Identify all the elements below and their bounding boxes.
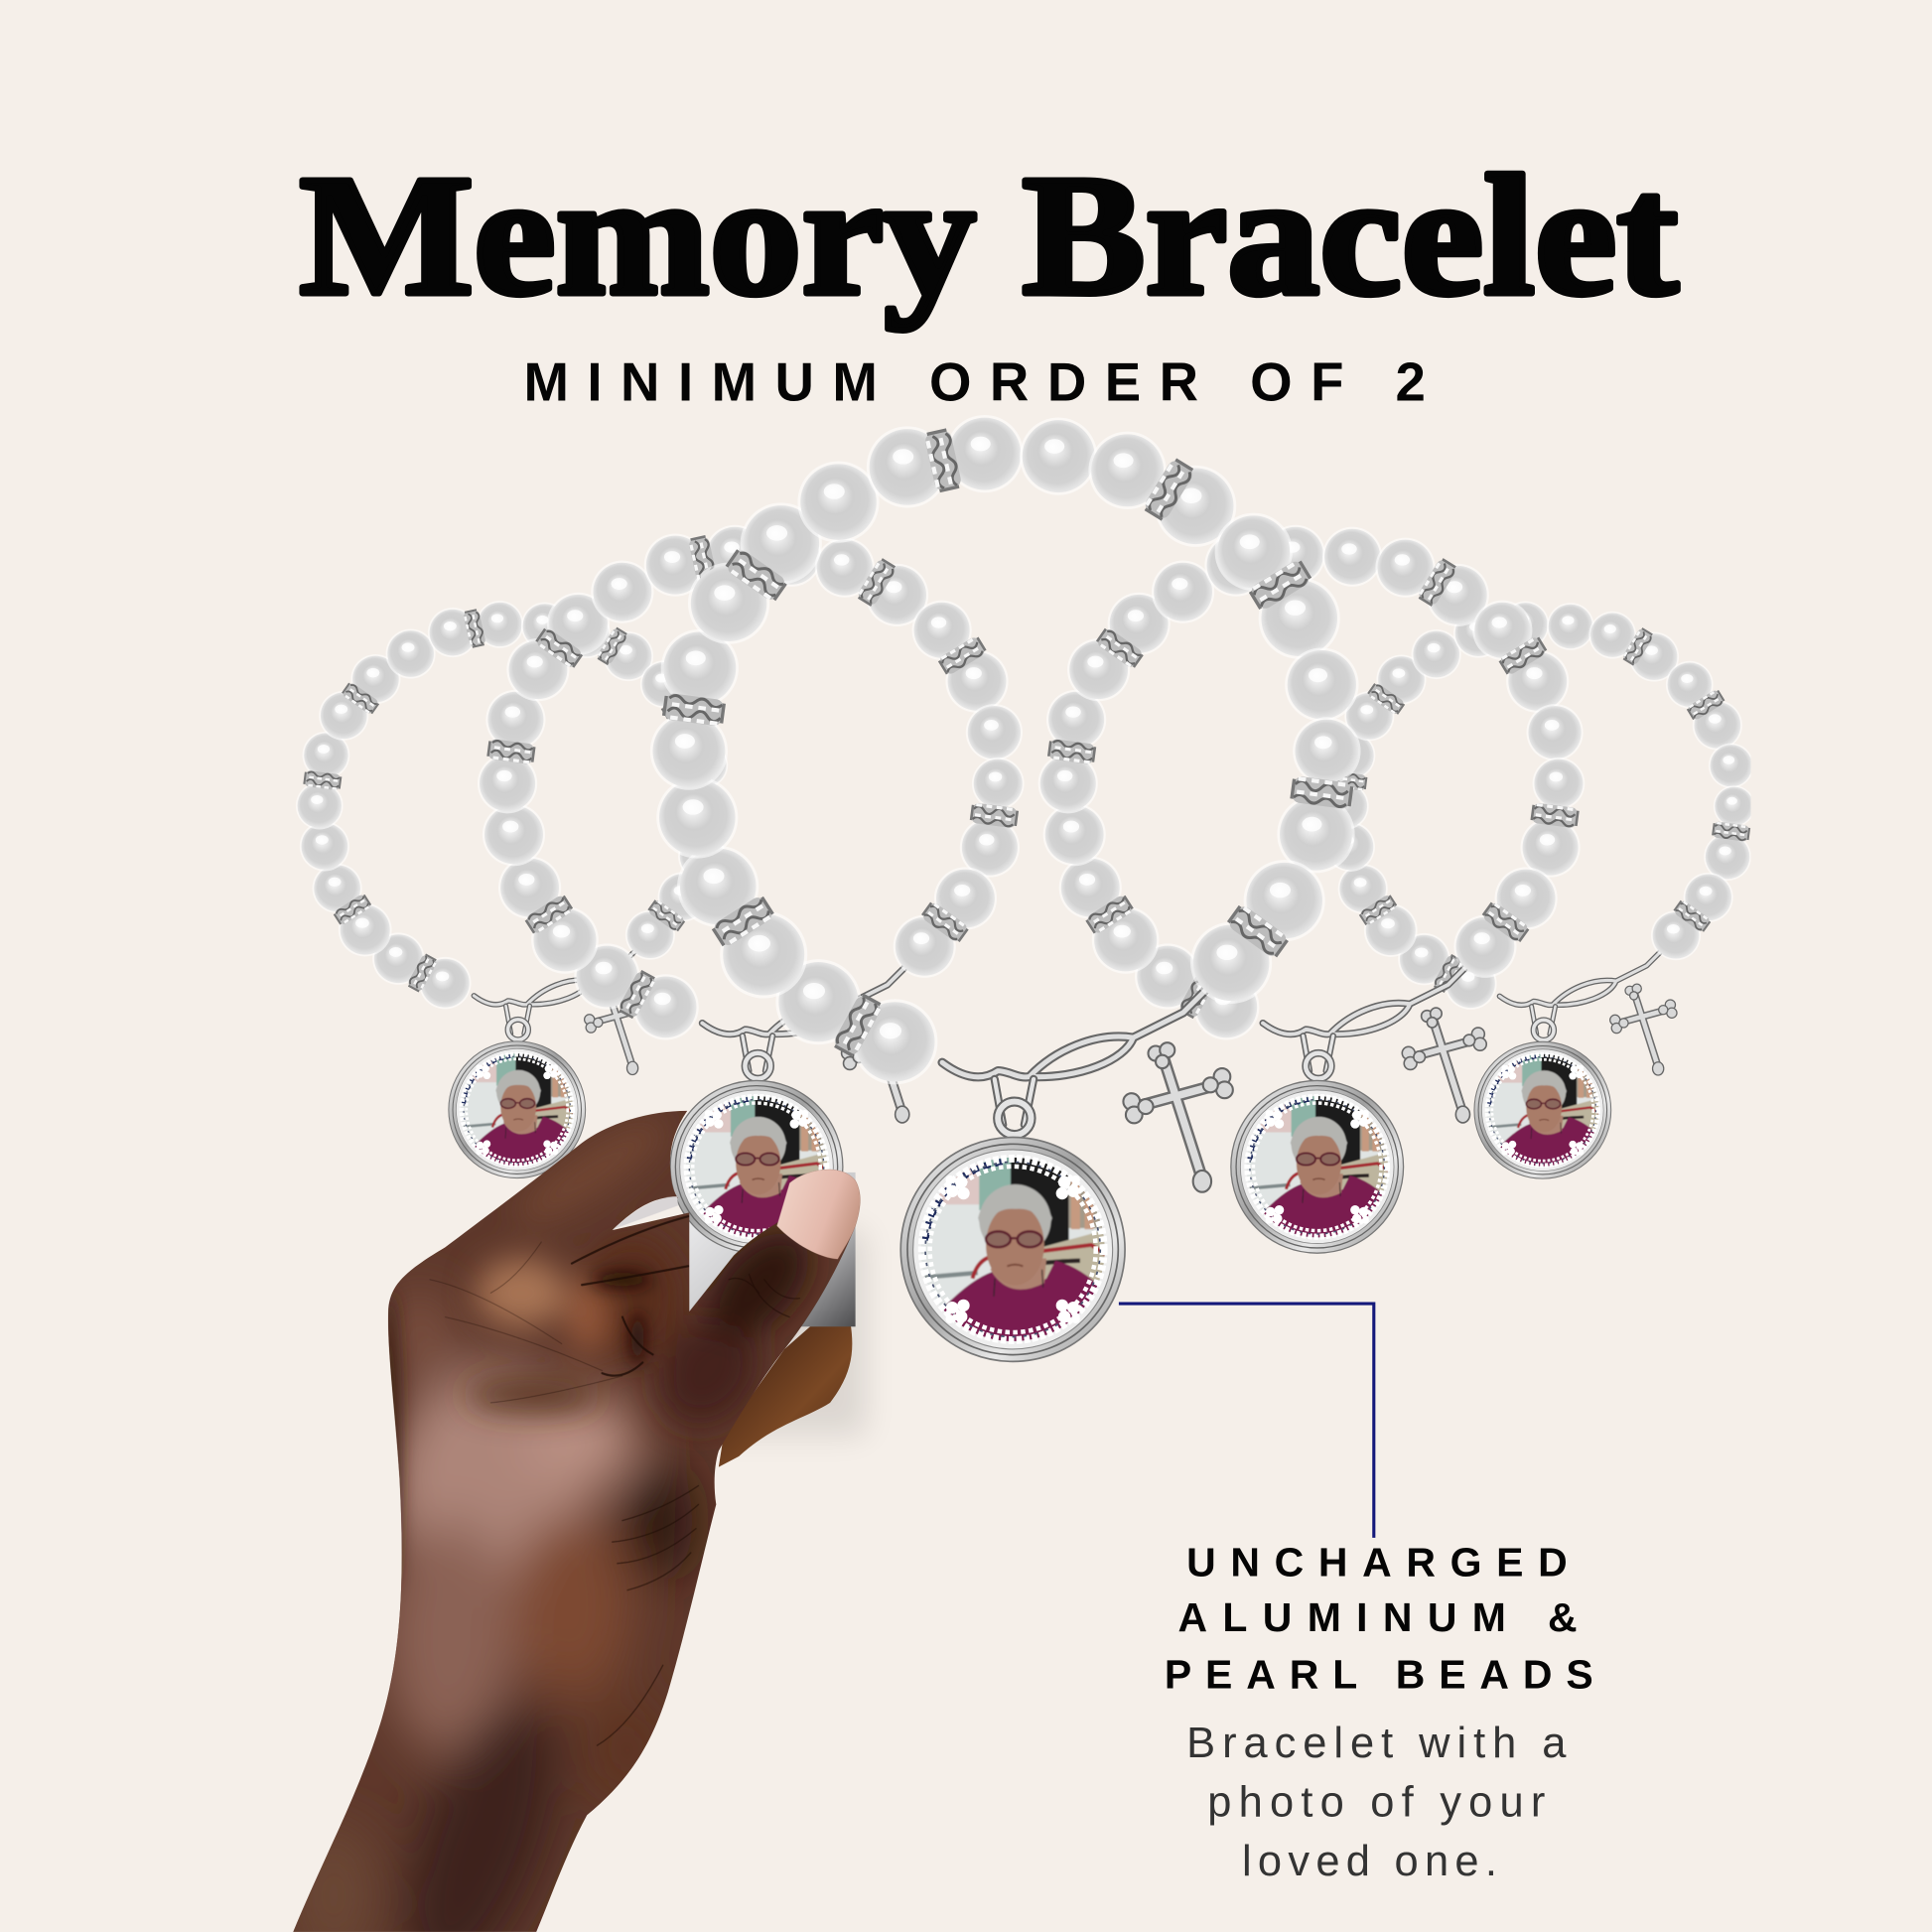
callout description bbox=[1186, 1720, 1567, 1885]
bracelet: medium right bbox=[1038, 525, 1585, 1253]
title: Memory Bracelet bbox=[300, 139, 1678, 331]
callout heading: ALUMINUM & bbox=[1177, 1594, 1578, 1640]
bracelet: medium left bbox=[478, 525, 1025, 1253]
callout line bbox=[1119, 1304, 1374, 1538]
bracelet: small left bbox=[296, 601, 730, 1178]
callout heading: PEARL BEADS bbox=[1165, 1651, 1593, 1697]
callout heading bbox=[1165, 1539, 1593, 1697]
card and shadow behind the fingers bbox=[689, 1173, 866, 1467]
thumbnail bbox=[777, 1170, 860, 1259]
callout description: loved one. bbox=[1242, 1838, 1497, 1885]
callout description: photo of your bbox=[1207, 1778, 1545, 1826]
icon: gap between index and middle finger bbox=[614, 1196, 678, 1229]
callout description: Bracelet with a bbox=[1186, 1720, 1567, 1767]
hand holding the pendant bbox=[288, 1104, 860, 1932]
bracelet: small right bbox=[1321, 602, 1755, 1178]
bracelet: large centre bbox=[650, 415, 1361, 1361]
subtitle: MINIMUM ORDER OF 2 bbox=[523, 351, 1426, 412]
callout heading: UNCHARGED bbox=[1186, 1539, 1568, 1585]
